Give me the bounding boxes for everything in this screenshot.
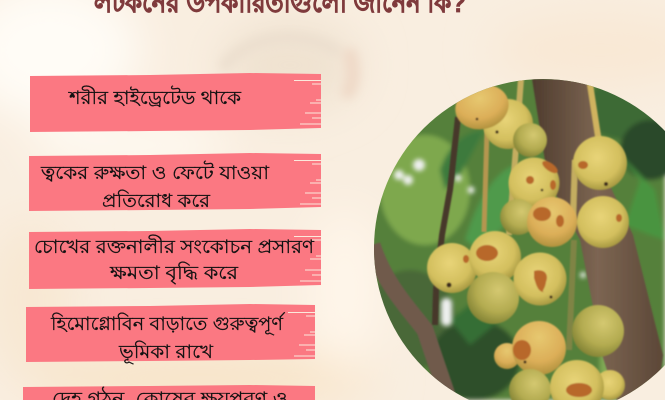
photo: lotkon fruit on tree in circle (365, 75, 665, 400)
foliage background (365, 75, 665, 400)
banner 3: চোখের রক্তনালীর সংকোচন প্রসারণ (34, 235, 315, 258)
banner 4 (26, 304, 315, 364)
banner 5 (23, 385, 315, 400)
bokeh highlights (394, 159, 586, 326)
banner 2 (29, 153, 321, 212)
banner 2: ত্বকের রুক্ষতা ও ফেটে যাওয়া (40, 161, 270, 184)
banner 1: শরীর হাইড্রেটেড থাকে (68, 86, 242, 109)
fruit spots (463, 159, 622, 397)
banner 1 (30, 73, 321, 132)
banner 3: ক্ষমতা বৃদ্ধি করে (109, 262, 239, 284)
branches (372, 79, 663, 400)
fruit cluster (427, 79, 629, 400)
banner 2: প্রতিরোধ করে (102, 190, 211, 212)
banner 4: ভূমিকা রাখে (118, 341, 214, 364)
banner 4: হিমোগ্লোবিন বাড়াতে গুরুত্বপূর্ণ (50, 312, 285, 335)
banner 3 (29, 229, 321, 289)
